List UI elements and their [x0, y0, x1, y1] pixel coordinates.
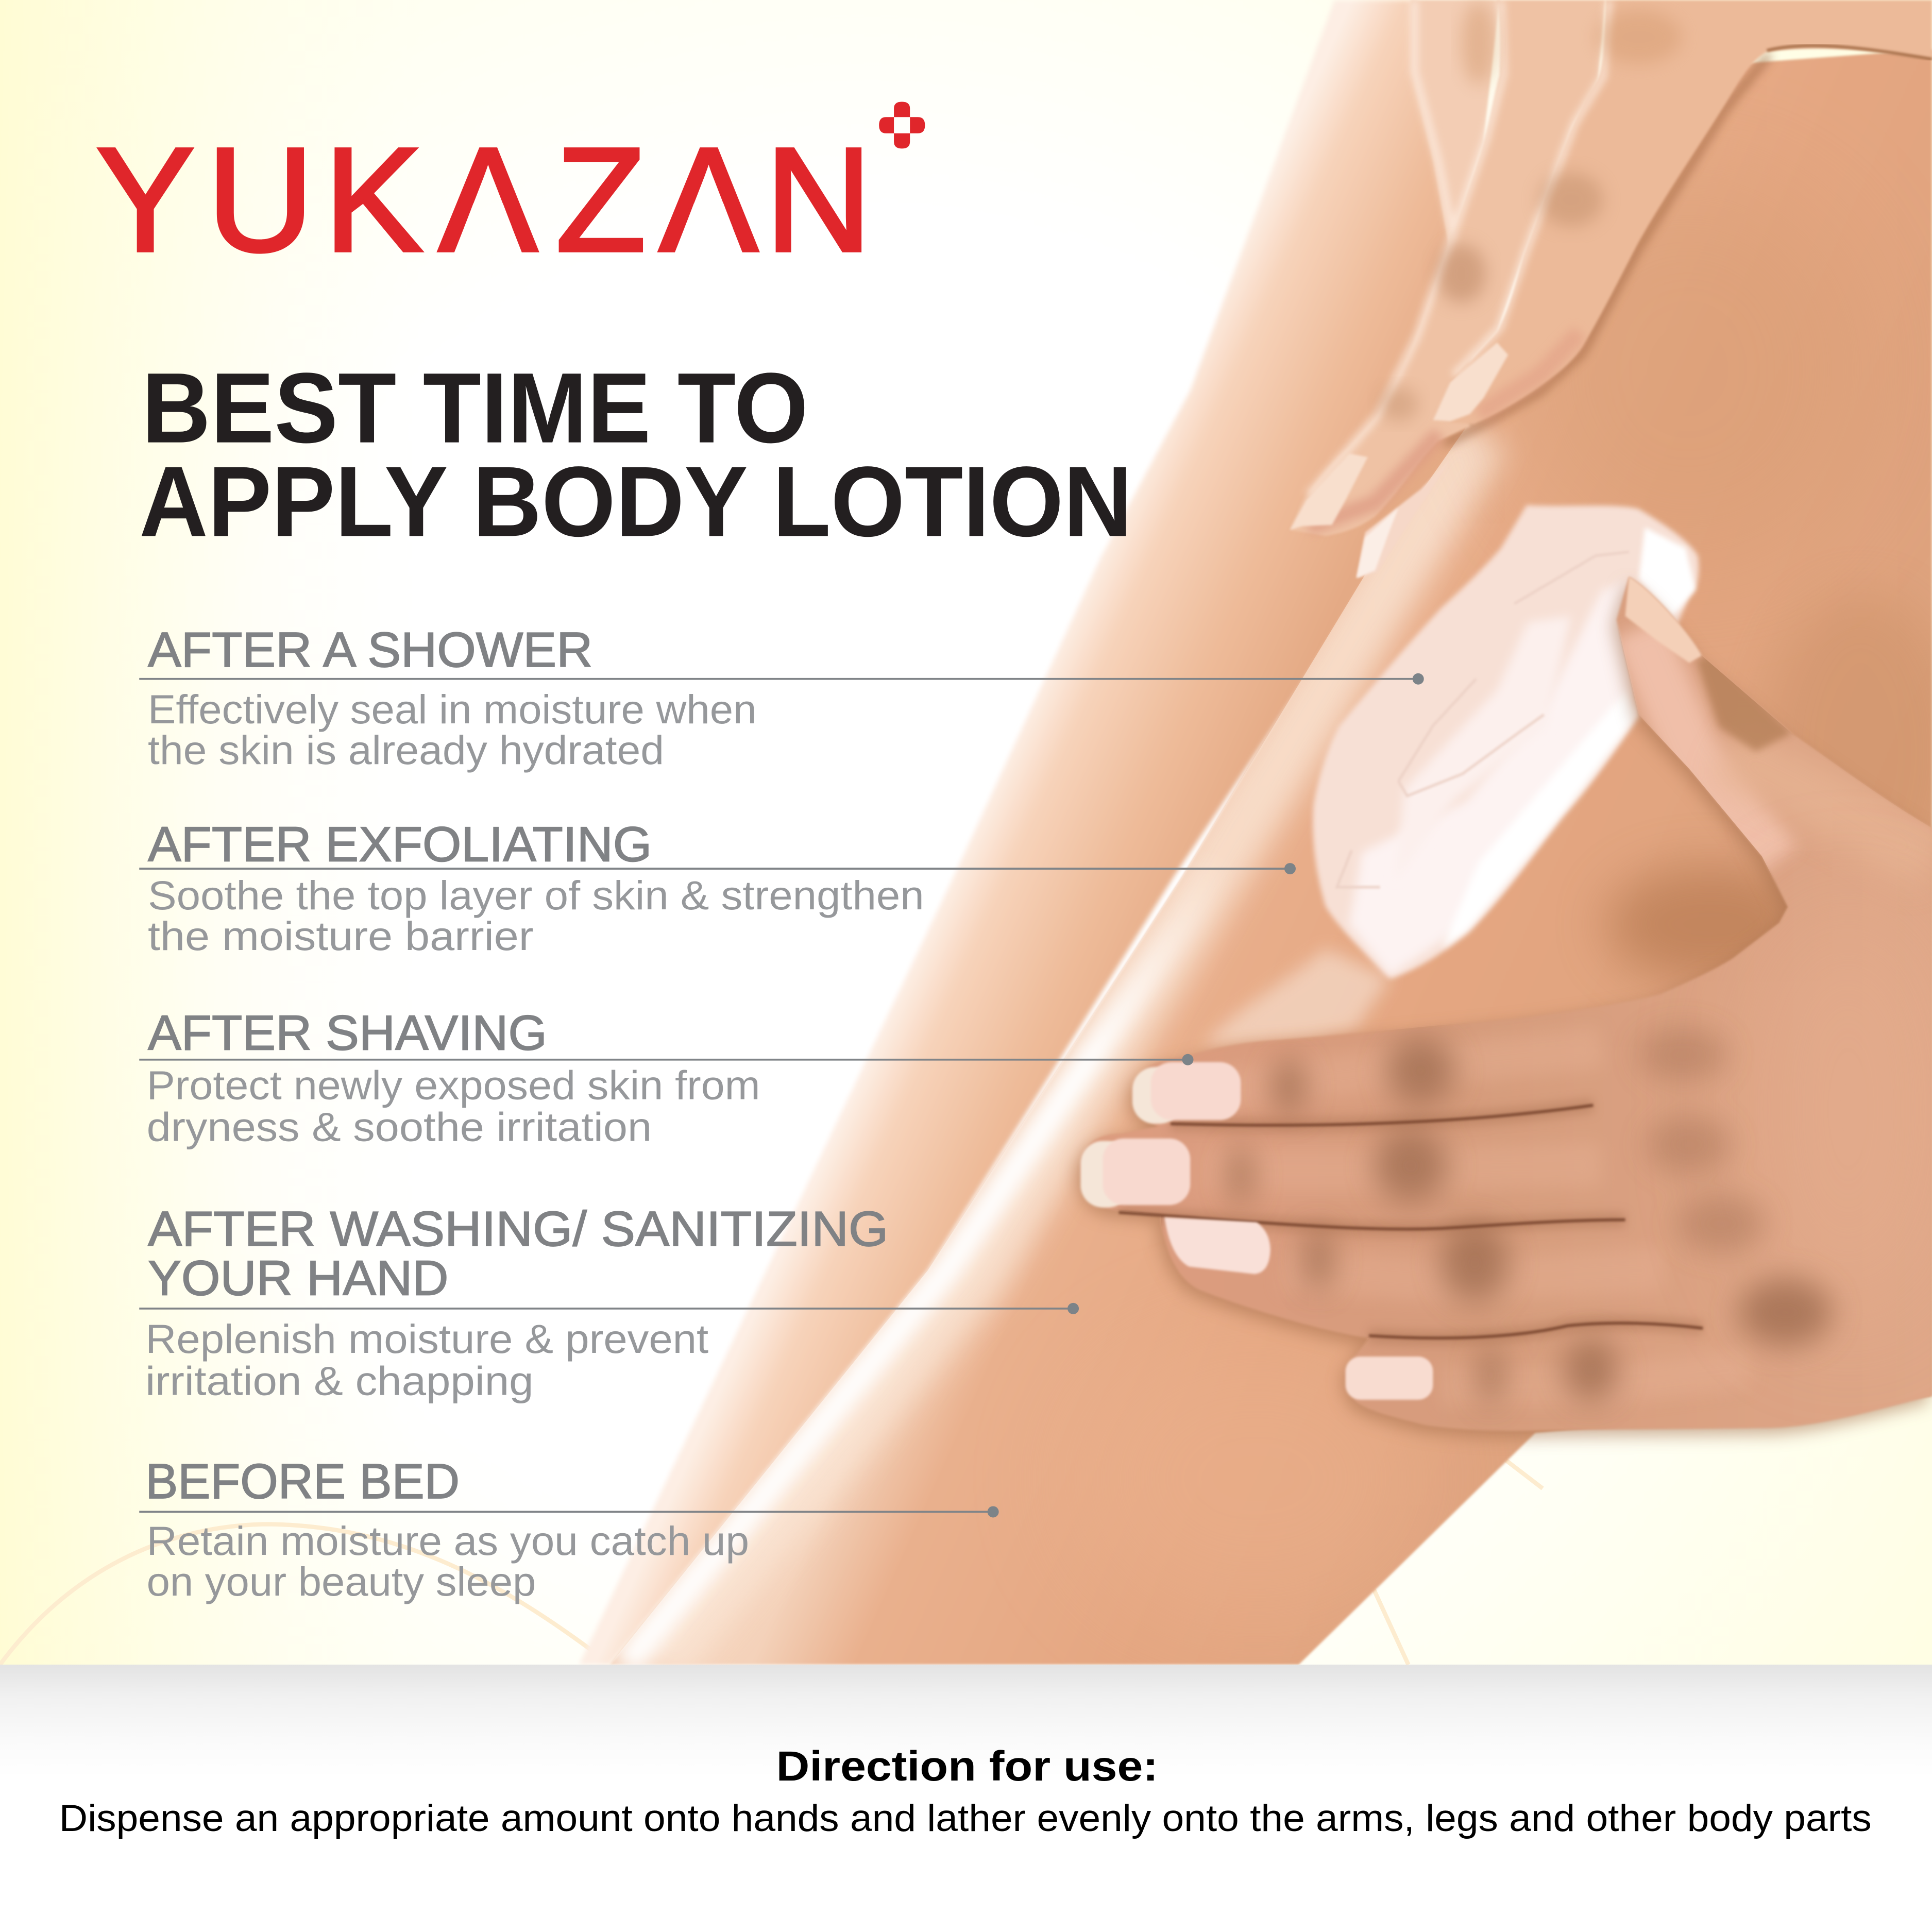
- item: after shaving: Protect newly exposed skin from: [147, 1062, 760, 1108]
- item: after washing or sanitizing your hand: [139, 1201, 1079, 1403]
- item: after a shower: Effectively seal in moisture when: [148, 687, 756, 732]
- background left glow: [0, 0, 419, 1665]
- finger separation lines: [1119, 1105, 1703, 1338]
- title: APPLY BODY LOTION: [139, 446, 1132, 557]
- upper hand: [1290, 0, 1932, 578]
- thumb colouring: [1639, 629, 1774, 862]
- directions for use: Dispense an appropriate amount onto hands and lather evenly onto the arms, legs and other body parts: [59, 1798, 1872, 1839]
- item: after washing or sanitizing your hand: Replenish moisture & prevent: [145, 1316, 708, 1362]
- finger grooves: [1119, 1105, 1703, 1338]
- front leg and thigh: [610, 49, 1932, 1665]
- item: after shaving: AFTER SHAVING: [148, 1006, 547, 1061]
- bottom panel: [0, 1665, 1932, 1932]
- logo cross icon: [879, 102, 925, 148]
- thumb nail: [1625, 577, 1702, 663]
- photo: legs and hands applying lotion: [579, 0, 1932, 1665]
- lotion smear: [1202, 505, 1699, 1047]
- item: after washing or sanitizing your hand: irritation & chapping: [145, 1358, 534, 1403]
- shadow of upper hand on thigh: [1444, 54, 1769, 444]
- rear finger: [1357, 459, 1451, 578]
- logo: YUKAZAN: [96, 102, 925, 282]
- item: after exfoliating: [139, 817, 1296, 959]
- item: after shaving: [139, 1006, 1193, 1150]
- item: before bed: Retain moisture as you catch up: [147, 1518, 749, 1564]
- item: before bed: on your beauty sleep: [147, 1559, 536, 1604]
- item: after exfoliating: AFTER EXFOLIATING: [148, 817, 652, 872]
- logo wordmark: YUKAZAN: [96, 117, 872, 282]
- item: after a shower: AFTER A SHOWER: [148, 622, 592, 677]
- title: [139, 353, 1132, 557]
- finger light bands: [1201, 1047, 1750, 1386]
- item: after shaving: dryness & soothe irritation: [147, 1105, 652, 1150]
- item: after a shower: the skin is already hydrated: [148, 727, 664, 773]
- item: after exfoliating: the moisture barrier: [148, 913, 534, 959]
- front finger and back of hand: [1433, 0, 1932, 424]
- decorative arcs: [0, 1460, 1543, 1665]
- item: before bed: BEFORE BED: [145, 1454, 460, 1509]
- item: after washing or sanitizing your hand: YOUR HAND: [148, 1251, 449, 1306]
- back leg: [579, 0, 1479, 1665]
- knuckles: [1228, 1028, 1832, 1404]
- hand highlight: [1750, 900, 1932, 1318]
- knuckle creases: [1437, 244, 1486, 303]
- wrist crease: [1767, 46, 1932, 59]
- directions for use: Direction for use:: [776, 1743, 1158, 1790]
- cast shadow of lower hand: [1077, 583, 1928, 1437]
- title: BEST TIME TO: [142, 353, 808, 464]
- lower hand with thumb: [1077, 577, 1932, 1437]
- pale finger edges: [1309, 0, 1609, 495]
- middle finger: [1290, 0, 1605, 536]
- item: after washing or sanitizing your hand: AFTER WASHING/ SANITIZING: [148, 1201, 888, 1257]
- item: before bed: [139, 1454, 999, 1604]
- item: after a shower: [139, 622, 1424, 773]
- upper nails: [1433, 343, 1508, 421]
- item: after exfoliating: Soothe the top layer of skin & strengthen: [148, 873, 924, 918]
- directions for use: [59, 1743, 1872, 1839]
- finger nails: [1132, 1067, 1182, 1124]
- pink finger undersides: [1309, 434, 1439, 528]
